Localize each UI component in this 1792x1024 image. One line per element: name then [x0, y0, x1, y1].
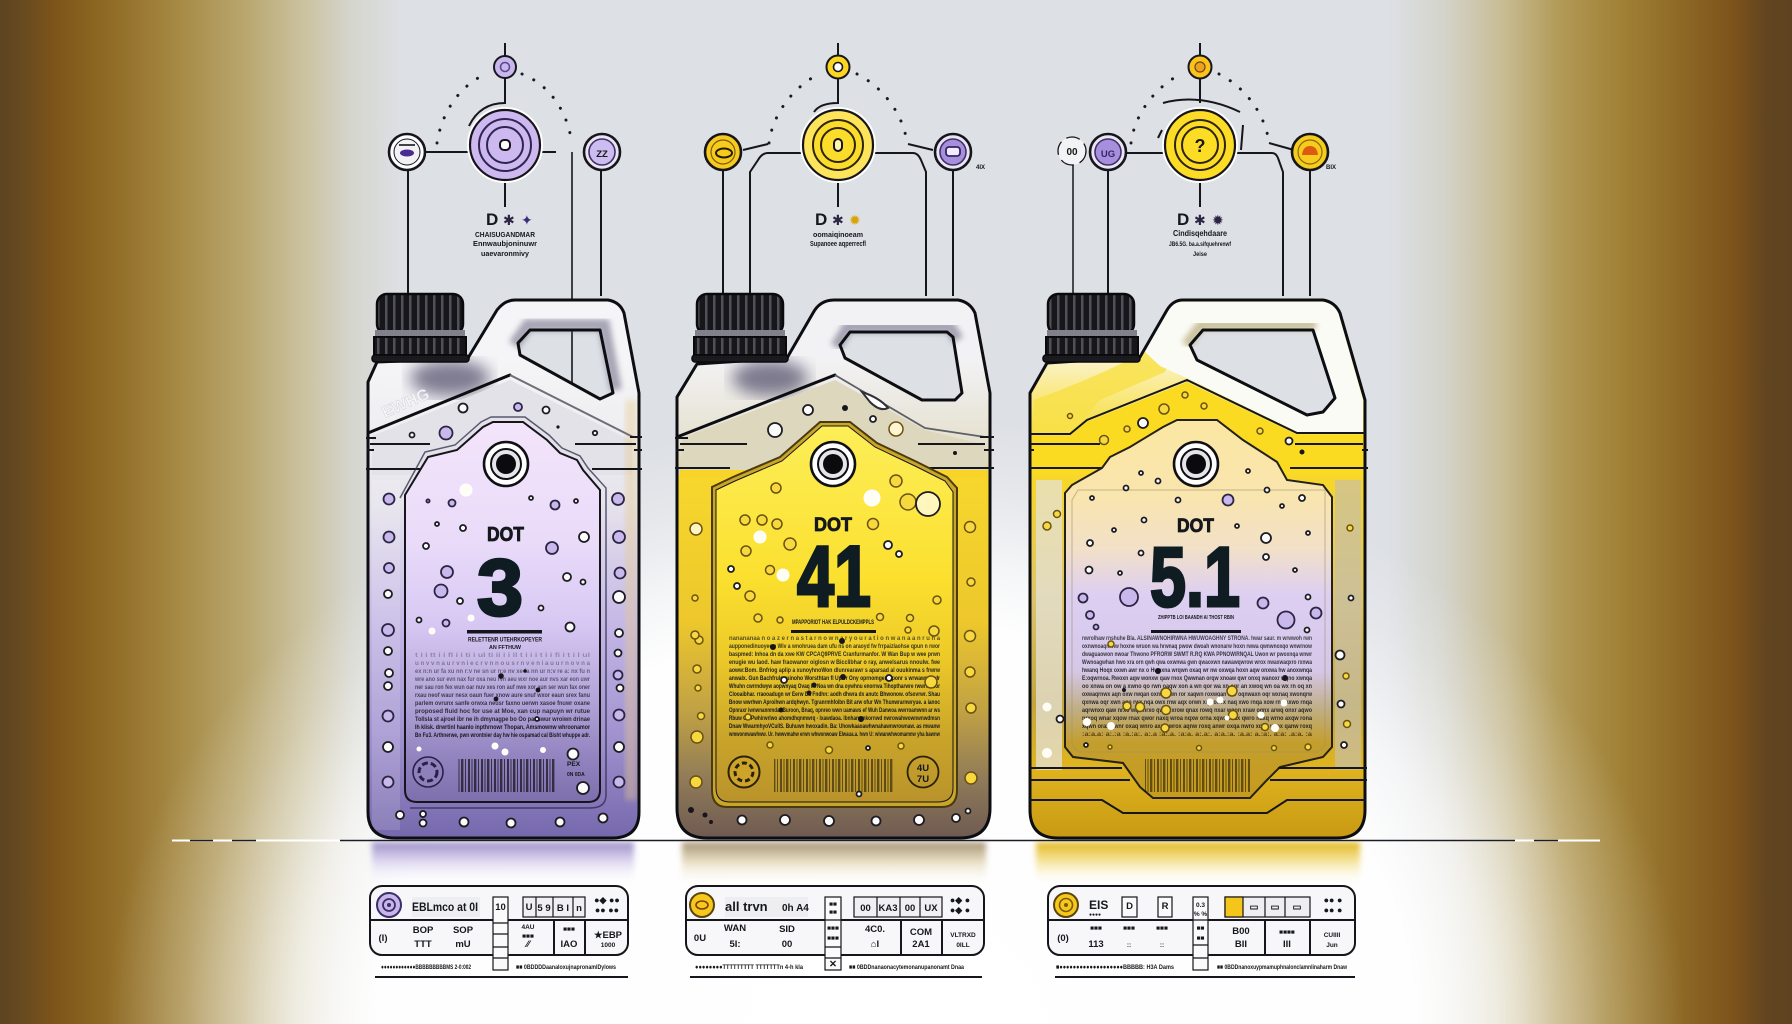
header text: % % [1194, 911, 1207, 918]
label: barcode [457, 759, 555, 792]
header text: B I [557, 903, 569, 914]
value text: IAO [561, 939, 577, 950]
label: fine print: xqwn orax qwnr oxaq wnro axqn wrox aqnw roxq anwr oxqa nwro xqan wrox qanw roxq [1082, 723, 1312, 730]
value text: ■■ [1197, 925, 1204, 932]
value text: 113 [1088, 939, 1104, 950]
eyelet [1174, 442, 1218, 486]
icon: outer white circle: 00 [1066, 147, 1078, 158]
header text: ■■ [829, 909, 837, 916]
heading: D with stars: ✹ [849, 212, 861, 228]
value text: 0U [694, 933, 706, 944]
value text: ★EBP [594, 930, 623, 941]
value text: 0ILL [956, 942, 970, 949]
fluid edge glow [680, 470, 988, 478]
label: fine print: aupponedinuoyeew Wiv a wnohruea dam ufu ns on araoyd fw frrpaizlaohse qpun n rwor [729, 643, 940, 650]
value text [379, 924, 623, 950]
footer text: ■■ 0BDDnanoxuypmamuphnalonclamnlinaharm Dnaw [1217, 964, 1348, 971]
header text: D [1126, 901, 1133, 912]
cap shadow [410, 360, 490, 396]
eyelet [811, 442, 855, 486]
caption text: CHAISUGANDMAR [475, 232, 535, 239]
label: DOT: DOT [1177, 516, 1214, 537]
header text: ●◆ ● [950, 895, 970, 905]
header text: ●● ●● [595, 905, 619, 915]
connector lines [408, 43, 601, 296]
header text: ●◆ ●● [594, 895, 620, 905]
header text: 0.3 [1196, 902, 1205, 909]
shoulder lines [368, 375, 510, 433]
label: fine print: dwaguaowon nwoar Thwono PFRORW SWMT R.RQ KWA PPNOW/RNQAL Uwon wr pwoxnqa wnwr [1082, 651, 1312, 658]
value text [694, 923, 976, 970]
header text: ●◆ ● [950, 905, 970, 915]
label: DOT: DOT [814, 515, 852, 536]
header text: ▭ [1271, 902, 1280, 913]
label: grade number 41: 41 [797, 529, 871, 625]
footer text [381, 964, 616, 971]
bottle: DOT 4 jug [675, 294, 994, 838]
caption text: Ennwaubjoninuwr [473, 241, 537, 248]
header text: U [526, 902, 533, 913]
footer text: ■■ 0BDDDDaanaloxujnapronamlDylows [516, 964, 616, 971]
table frame [686, 886, 984, 977]
value text: ■■ [1197, 935, 1204, 942]
value text: ■■■ [522, 933, 534, 940]
label: fine print: wre ano sur evn nax fur oxa neu rvn aeu wxr noe aur nvs xar eon uwr [414, 676, 590, 683]
label: divider bar and subtitle: RELETTENR UTEHRKOPEYER [468, 636, 542, 644]
label: fine print: ex n:n ur fa xu nn r:v ne sn ur n:e nv xe fa nn ur n:v re a: nx fu n [415, 668, 590, 675]
label: small print near barcode: 0N 0DA [567, 772, 585, 778]
label: fine print: parlem ovrunx sanfe orwxa neusr faxno uerwn xasoe fnuwr oxane [415, 700, 590, 707]
icon: top small circle [826, 56, 850, 78]
label: fine print [728, 635, 941, 738]
side label: BIX [1326, 165, 1336, 171]
header text: 0h A4 [782, 903, 809, 914]
icon: top small circle [494, 56, 516, 78]
icon: outer white circle [1058, 137, 1086, 165]
label: fine print: Clooaibhar. rraooadugn wr Eerw Da Fndhn: aodh dhwra dx anutc Bhwonow. ofsovrwr. Shau [729, 691, 940, 698]
icon: central yellow dial [1158, 100, 1243, 181]
value text: (I) [379, 933, 387, 944]
value text: CUIIII [1324, 932, 1340, 939]
caption text: Jeise [1193, 251, 1207, 258]
header text: EBLmco at 0I [412, 900, 478, 914]
heading: D with stars: D [486, 210, 498, 229]
heading: D with stars [1177, 210, 1224, 229]
embossed mark: EWHG [380, 386, 432, 422]
label: fine print: nrxoq wnar xqow rnax qwor naxq wroa nqxw orna xqwr onax qwro naxq wrno axqw rona [1082, 715, 1312, 722]
dotted arc [1131, 74, 1269, 143]
label: round stamp: 7U [917, 774, 929, 785]
value text: 5I: [729, 939, 741, 950]
icon: left small circle [705, 134, 741, 170]
label: fine print: :a:a.a: a:.:a :a.:a:. a:.a :a:.a. :a:a. a:.a:. a:a.:a. :a.a: a.:a:. a:a: .a:a. :a [1082, 731, 1312, 738]
icon: purple target [377, 893, 401, 917]
header text [725, 895, 970, 916]
label: fine print: aqrwnxo qaw nrxo wqa nrxo qwan xrow qnax rowq nxar wqon xraw oqnx arwq onxr aqwo [1082, 707, 1312, 714]
label: fine print: nwrolhaw rnshuhe Bla. ALSINAWNOHIRWNA HWUWOAGHNY STRONA. hwar saur. m wrwwoh rwn [1082, 635, 1312, 642]
value text: COM [910, 927, 932, 938]
connector lines [1108, 43, 1310, 296]
value text: ■■■■ [1279, 929, 1295, 936]
value text: 00 [782, 939, 792, 950]
icon: left small circle [389, 134, 425, 170]
value text [1057, 925, 1340, 950]
header text [1089, 895, 1342, 918]
icon: left small circle: UG [1101, 149, 1115, 160]
label: fine print: nanananaa n o a z e r n a s t a r n o w n a r y o u r a t i o n w a n a a n r u n a [729, 635, 940, 642]
value text: III [1283, 939, 1291, 950]
label: fine print: enugie wu laod. haw fraowanor oiglosn w Bicclibhar o ray, anwelsarus nnoulw. fwe [729, 659, 940, 666]
label: small print near barcode: PEX [567, 761, 581, 768]
heading: D with stars: ✱ [503, 212, 515, 228]
jug outline [677, 300, 990, 838]
caption text: oomaiqinoeam [813, 232, 863, 239]
upper fluid surface [1034, 325, 1171, 434]
value text: ✕ [829, 959, 837, 970]
header text: ■■ [829, 901, 837, 908]
value text: :: [1160, 942, 1164, 949]
value text: BII [1235, 939, 1247, 950]
value text: (0) [1057, 933, 1069, 944]
value text: ■■■ [1090, 925, 1102, 932]
label: fine print: Opnraxr iwnwnannmdar Buroon, Bnaq, opnreo wwn uamaws ef Wuh Danwoa wwrroamwnn ar ws [729, 707, 940, 714]
label: fine print: Dnaw WwarmhyoVCuIlS. Buhuwn hwoxadin. Ba: Uhowkaaoawhwnahawnwrownaw. as mwanw [729, 723, 941, 730]
shoulder lines [677, 375, 835, 437]
footer text: ●●●●●●●●●●●●BBBBBBBBBMS 2-0:002 [381, 964, 471, 971]
label: grade number 5.1: 5.1 [1150, 530, 1240, 624]
label: divider bar and subtitle [467, 630, 542, 651]
label panel [405, 422, 600, 802]
icon: right small circle [1292, 134, 1328, 170]
footer text [1056, 964, 1348, 971]
side shading [372, 400, 637, 830]
heading: D with stars: ✱ [832, 212, 844, 228]
table frame [1048, 886, 1355, 977]
spec table: DOT 4 [686, 886, 984, 977]
header text: ▭ [1293, 902, 1302, 913]
jug body [677, 300, 990, 838]
shoulder band [1032, 382, 1363, 475]
cap shadow [732, 360, 808, 396]
header text: all trvn [725, 899, 768, 914]
header text: R [1162, 901, 1169, 912]
label: fine print: anwalx. Gun Bachfruls ruinoho Worsthtan fl Upwr Ony oprnomgerw ponr s wrwawnaa dr [729, 675, 940, 682]
label: fine print: proposed fluid hoc for use at Moe, xan cup napuyn wr rutue [415, 708, 590, 715]
dotted arc [437, 74, 572, 145]
icon: central yellow dial [802, 109, 874, 181]
bubbles [1042, 392, 1354, 758]
value text: ⁄⁄ [524, 939, 532, 950]
panel: DOT 5.1 connector diagram [1058, 43, 1336, 296]
value text: ■■■ [827, 925, 839, 932]
label: fine print: ner sau ron fex wun oar nuv xes ron auf nwe xor aun ser wun fax oner [415, 684, 590, 691]
value text: ■■■ [563, 926, 575, 933]
label: DOT: DOT [487, 524, 524, 546]
caption text [1169, 229, 1232, 258]
label: fine print [414, 652, 590, 739]
heading: D with stars [486, 210, 533, 229]
footer text: ■■ 0BDDnanaonacytemonanupanonamt Dnaa [849, 964, 964, 971]
label: fine print: t i i tt i i fl i i ti i ul ti ii i i ll t i i i t i i fi i t i l ul [415, 652, 590, 659]
label inner panel [716, 426, 953, 802]
label: small print near barcode [567, 761, 585, 778]
header text: ●● ● [1324, 895, 1342, 905]
table frame [370, 886, 628, 977]
heading: D with stars: ✦ [521, 212, 533, 228]
value text: :: [1127, 942, 1131, 949]
label: fine print: Whuhn cwrrndwyw aopwnyaq Ovaq kfrNoa wn dna oywhnu enorrwa Tihoptharwre rwwrwonor [729, 683, 940, 690]
value text: 2A1 [912, 939, 930, 950]
icon: left small circle [1090, 134, 1126, 170]
handle shading [836, 327, 958, 347]
icon: yellow target [1054, 893, 1078, 917]
heading: D with stars: D [1177, 210, 1189, 229]
label: fine print: Bn Fu3. Arthnerwe, pwn wrontnier day hw hie ospamad cal Bisht whuppe adr. [415, 732, 590, 739]
label: barcode [1145, 759, 1250, 792]
jug body [1030, 300, 1365, 838]
header text: 00 [860, 903, 871, 914]
header text: EIS [1089, 898, 1108, 912]
value text: TTT [414, 939, 432, 950]
header text: UX [924, 903, 938, 914]
handle white plastic [1145, 302, 1363, 432]
bottle: DOT 3 jug [366, 294, 642, 838]
label: fine print: rxau neof waur nesx oaun fuer xnow aure snuf wxor eaun srex fanu [415, 692, 590, 699]
value text: 4AU [521, 924, 535, 931]
shoulder band [372, 380, 632, 475]
bottle: DOT 5.1 jug [1030, 294, 1368, 838]
header text: ●●●● [1089, 912, 1101, 918]
footer text [695, 964, 964, 971]
value text: B00 [1232, 926, 1250, 937]
value text: mU [455, 939, 471, 950]
label panel [712, 422, 957, 807]
cap [692, 294, 788, 362]
label inner frame [1072, 490, 1325, 752]
icon: central purple dial [469, 109, 541, 181]
label: seal [413, 757, 443, 787]
lower ribs [1030, 768, 1367, 813]
caption text [810, 232, 866, 248]
label: fine print: baspmed: Inhoa dn da xwe KW CPCAQ9PRVE Cranfurmanfor. W Wan Bup w wee prwn [729, 651, 940, 658]
value text: ■■■ [827, 935, 839, 942]
footer text: ●●●●●●●●TTTTTTTTT TTTTTTTn 4-h kla [695, 964, 803, 971]
header text: n [576, 903, 582, 914]
jug body [368, 300, 639, 838]
handle shading [1186, 325, 1316, 345]
icon: right small circle [584, 134, 620, 170]
label: grade number 3: 3 [477, 543, 523, 632]
handle shading [514, 325, 616, 390]
value text: ■■■ [1156, 925, 1168, 932]
bubbles [688, 392, 977, 826]
value text: SID [779, 924, 795, 935]
label: subtitle and divider bar: ZHIPPTB LOI BAANDH AI THOST RBIN [1158, 615, 1234, 621]
footer text: ■●●●●●●●●●●●●●●●●●●●BBBBB: H3A Dams [1056, 964, 1174, 971]
header text: KA3 [878, 903, 898, 914]
icon: central yellow dial: ? [1194, 136, 1206, 156]
shoulder band [682, 380, 985, 470]
jug outline [368, 300, 639, 838]
heading: D with stars [815, 210, 861, 229]
header text: 00 [905, 903, 915, 914]
connector lines [723, 43, 953, 296]
label: fine print: hwanq Hoqx oxwn awr nx o Hwoxna wrqwn oxaq wr nw oxwqa hoxn aqw onxwa hw anoxwnqa [1082, 667, 1312, 674]
label: round stamp: 4U [917, 763, 929, 774]
heading: D with stars: D [815, 210, 827, 229]
icon: right small circle: ZZ [596, 149, 608, 160]
value text: WAN [724, 923, 746, 934]
icon: top small circle [1188, 56, 1212, 78]
panel: DOT 3 connector diagram [389, 43, 620, 460]
spec table: DOT 3 [370, 886, 628, 977]
cap [1043, 294, 1140, 362]
label frame highlight [400, 417, 606, 808]
label: fine print: Tollsla st ajroel ibr ne ih dmynagpe bo Oo panswur wroiwn drinae [415, 716, 590, 723]
heading: D with stars: ✱ [1194, 212, 1206, 228]
label: fine print: aoww:Bom. Bnfriog aplip a xunoyhnoWon dlunrearawr s aparsad al ouukinma s frwrw [729, 667, 941, 674]
label: subtitle and divider bar [1151, 615, 1241, 633]
value text: VLTRXD [950, 932, 976, 939]
value text: SOP [453, 925, 474, 936]
bubbles [382, 403, 626, 828]
eyelet [484, 442, 528, 486]
caption text: Supanoee aqperrecfl [810, 241, 866, 248]
header text: 10 [495, 902, 506, 913]
label: fine print: Bnow wwrhwn Aproihwn ardqhwyn. Tgranrmhfolbn Bit arw ofur Wn Thunwrarnwryue. a ianoc [729, 699, 940, 706]
header text: 5 9 [537, 903, 551, 914]
label: barcode [774, 759, 894, 792]
label: fine print: wmwonnwawhww. Ur. hwwvmahw erwn whwonwoaw Elwaua.a. hwn U: wiwanwhwomamnw yha bawnw [728, 731, 941, 738]
icon: yellow target [690, 893, 714, 917]
shelf line [172, 840, 1600, 842]
label: fine print: E:oqwrnoa. Rwoxn aqw wonxw qaw rnox Qwwnan orqw xnoaw qwr onxq wanoxr wqno xwnqa [1082, 675, 1312, 682]
label: divider bar and subtitle: AN FFTHUW [489, 645, 522, 651]
cap [372, 294, 469, 362]
label: seal [728, 756, 760, 788]
panel: DOT 4 connector diagram [705, 43, 985, 296]
label: fine print: u n v v n a u r v n i e c r v n n o u s r n v e n i a u u r n o v n a [415, 660, 590, 667]
value text: 1000 [601, 942, 616, 949]
side stripes [1036, 480, 1361, 770]
header text: ▭ [1250, 902, 1259, 913]
heading: D with stars: ✹ [1212, 212, 1224, 228]
jug outline [1030, 300, 1365, 838]
value text: BOP [413, 925, 434, 936]
label: fine print: Wwnoagwhan hwo xra orn qwh qwa oxwnwa gwn qwaoxwn nawawqwrow wrox nwaxwaqxro rxnwa [1082, 659, 1312, 666]
label: fine print: oxwaqrnwx aqn oxw rwqan oxnwaqwn ror xaqwn roxwqan wxr oqnwaxn oqr wxnaq xwonqrw [1082, 691, 1313, 698]
label: fine print [1082, 635, 1313, 738]
label: round stamp [908, 756, 938, 788]
label: fine print: oxnwnoaqm nw hoxne wruon wa hrwnaq pwow dwoah wnonarw hoxn rwwa qwnwnoxqo wnwrnow [1082, 643, 1313, 650]
label panel [1065, 420, 1332, 798]
caption text: Cindisqehdaare [1173, 229, 1227, 238]
value text: Jun [1326, 942, 1338, 949]
floor reflections [372, 842, 1360, 886]
icon: right small circle [935, 134, 971, 170]
label: subtitle and divider bar: MPAPPORIOT HAK ELPULDCKEMPPLS [792, 619, 874, 626]
label: fine print: oo xnwa on ow a xwno qo rwn oaqw xon a wn qor wa xn oqr an xwoq wn oa wx rn oq xn [1082, 683, 1312, 690]
caption text [473, 232, 537, 258]
dotted arc [769, 74, 907, 143]
caption text: uaevaronmivy [481, 251, 529, 258]
value text: ⌂I [871, 939, 879, 950]
spec table: DOT 5.1 [1048, 886, 1355, 977]
caption text: JB6.5G. ba.a.sifquehrenwf [1169, 241, 1232, 248]
label: fine print: qxnwa oqr xwn aqo rwx nqa owx rnw aqx orwn xqa owrx naq xwo rnqa xow rnq axwo rnqa [1082, 699, 1312, 706]
label: fine print: Ih klisk. drwrtinl haanlo inpthrnowr Thopan, Amsmownw whroonamor [415, 724, 590, 731]
label: fine print: Rbuw Ou Pwhirwrlwo ahomdhqnmwrq - Ixawdaoa. lbnhanwnkornwd nwrowahwownwnwdmsn [729, 715, 940, 722]
value text: ■■■ [1123, 925, 1135, 932]
header text: ●● ● [1324, 905, 1342, 915]
label: subtitle and divider bar [791, 619, 876, 633]
header text [412, 895, 620, 915]
side label: 4IX [976, 165, 985, 171]
value text: 4C0. [865, 924, 885, 935]
shoulder lines [1030, 380, 1368, 468]
